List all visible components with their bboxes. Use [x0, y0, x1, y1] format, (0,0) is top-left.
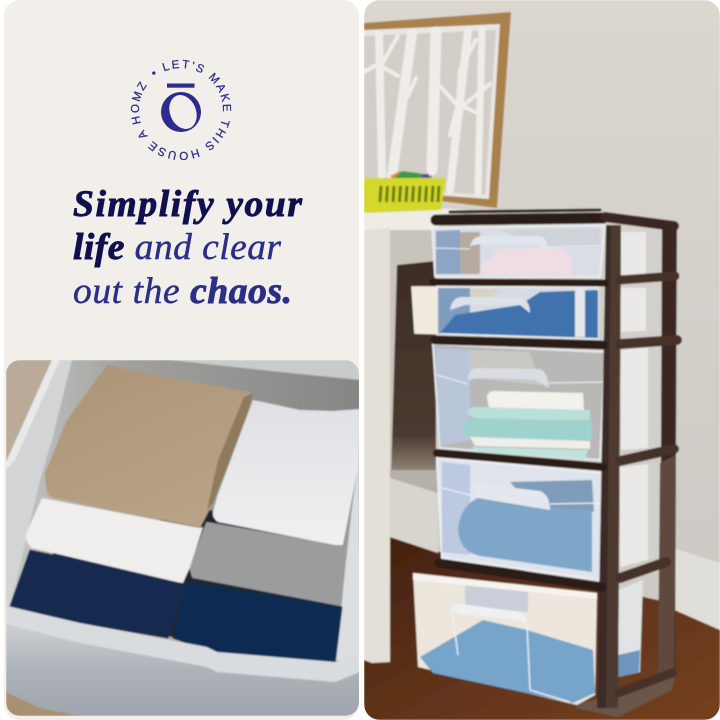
logo badge — [130, 60, 232, 160]
handle 3 — [468, 368, 549, 388]
wall under table — [390, 230, 433, 266]
heading — [73, 184, 302, 312]
bin front rim — [6, 606, 360, 682]
front post — [597, 225, 621, 708]
heading line 2: life and clear — [73, 227, 281, 268]
towel stack — [462, 391, 592, 459]
bin left wall — [6, 360, 72, 606]
bottom floor corner — [6, 692, 80, 716]
handle 1 — [470, 236, 547, 250]
icon: macron bar — [167, 84, 194, 88]
circular slogan: • LET'S MAKE THIS HOUSE A HOMZ — [130, 60, 232, 160]
bin right wall — [336, 460, 360, 660]
baseboard left — [390, 478, 438, 553]
photo: storage drawers in room — [364, 0, 720, 720]
grey garment — [190, 517, 350, 605]
bin front face — [6, 615, 360, 716]
navy garment right — [173, 582, 342, 664]
drawer 3 — [433, 344, 605, 460]
yellow basket — [364, 171, 446, 213]
tan garment — [45, 365, 253, 528]
photo: folded clothes in drawer — [6, 360, 360, 716]
table top — [364, 208, 470, 230]
white garment left — [26, 498, 203, 583]
drawer 4 — [437, 458, 605, 580]
wall under shade — [390, 470, 438, 493]
side panel shading — [646, 232, 662, 560]
rear post — [660, 224, 677, 675]
drawer 5 — [413, 573, 597, 705]
drawer 2 — [412, 287, 598, 339]
handle 2 — [450, 297, 530, 313]
wall — [364, 0, 720, 601]
dark gap behind drawers — [391, 261, 436, 478]
bin interior — [6, 360, 360, 660]
handle 5 — [452, 604, 527, 625]
table leg — [364, 228, 390, 663]
navy garment left — [10, 550, 185, 638]
side panels — [617, 232, 648, 678]
drawer 1 — [432, 225, 605, 277]
heading line 3: out the chaos. — [73, 271, 292, 312]
white garment right — [213, 400, 360, 545]
dark frame bars — [433, 210, 677, 693]
handle 4 — [478, 487, 551, 511]
panel: cream background — [4, 0, 359, 720]
garment shadow — [52, 510, 339, 638]
base — [575, 672, 675, 717]
bin back rim — [170, 360, 360, 380]
picture frame — [364, 12, 511, 208]
icon: letter o — [161, 91, 202, 133]
heading line 1: Simplify your — [73, 184, 302, 225]
floor — [364, 520, 720, 720]
baseboard right — [670, 547, 720, 630]
tree cutouts — [364, 30, 490, 192]
